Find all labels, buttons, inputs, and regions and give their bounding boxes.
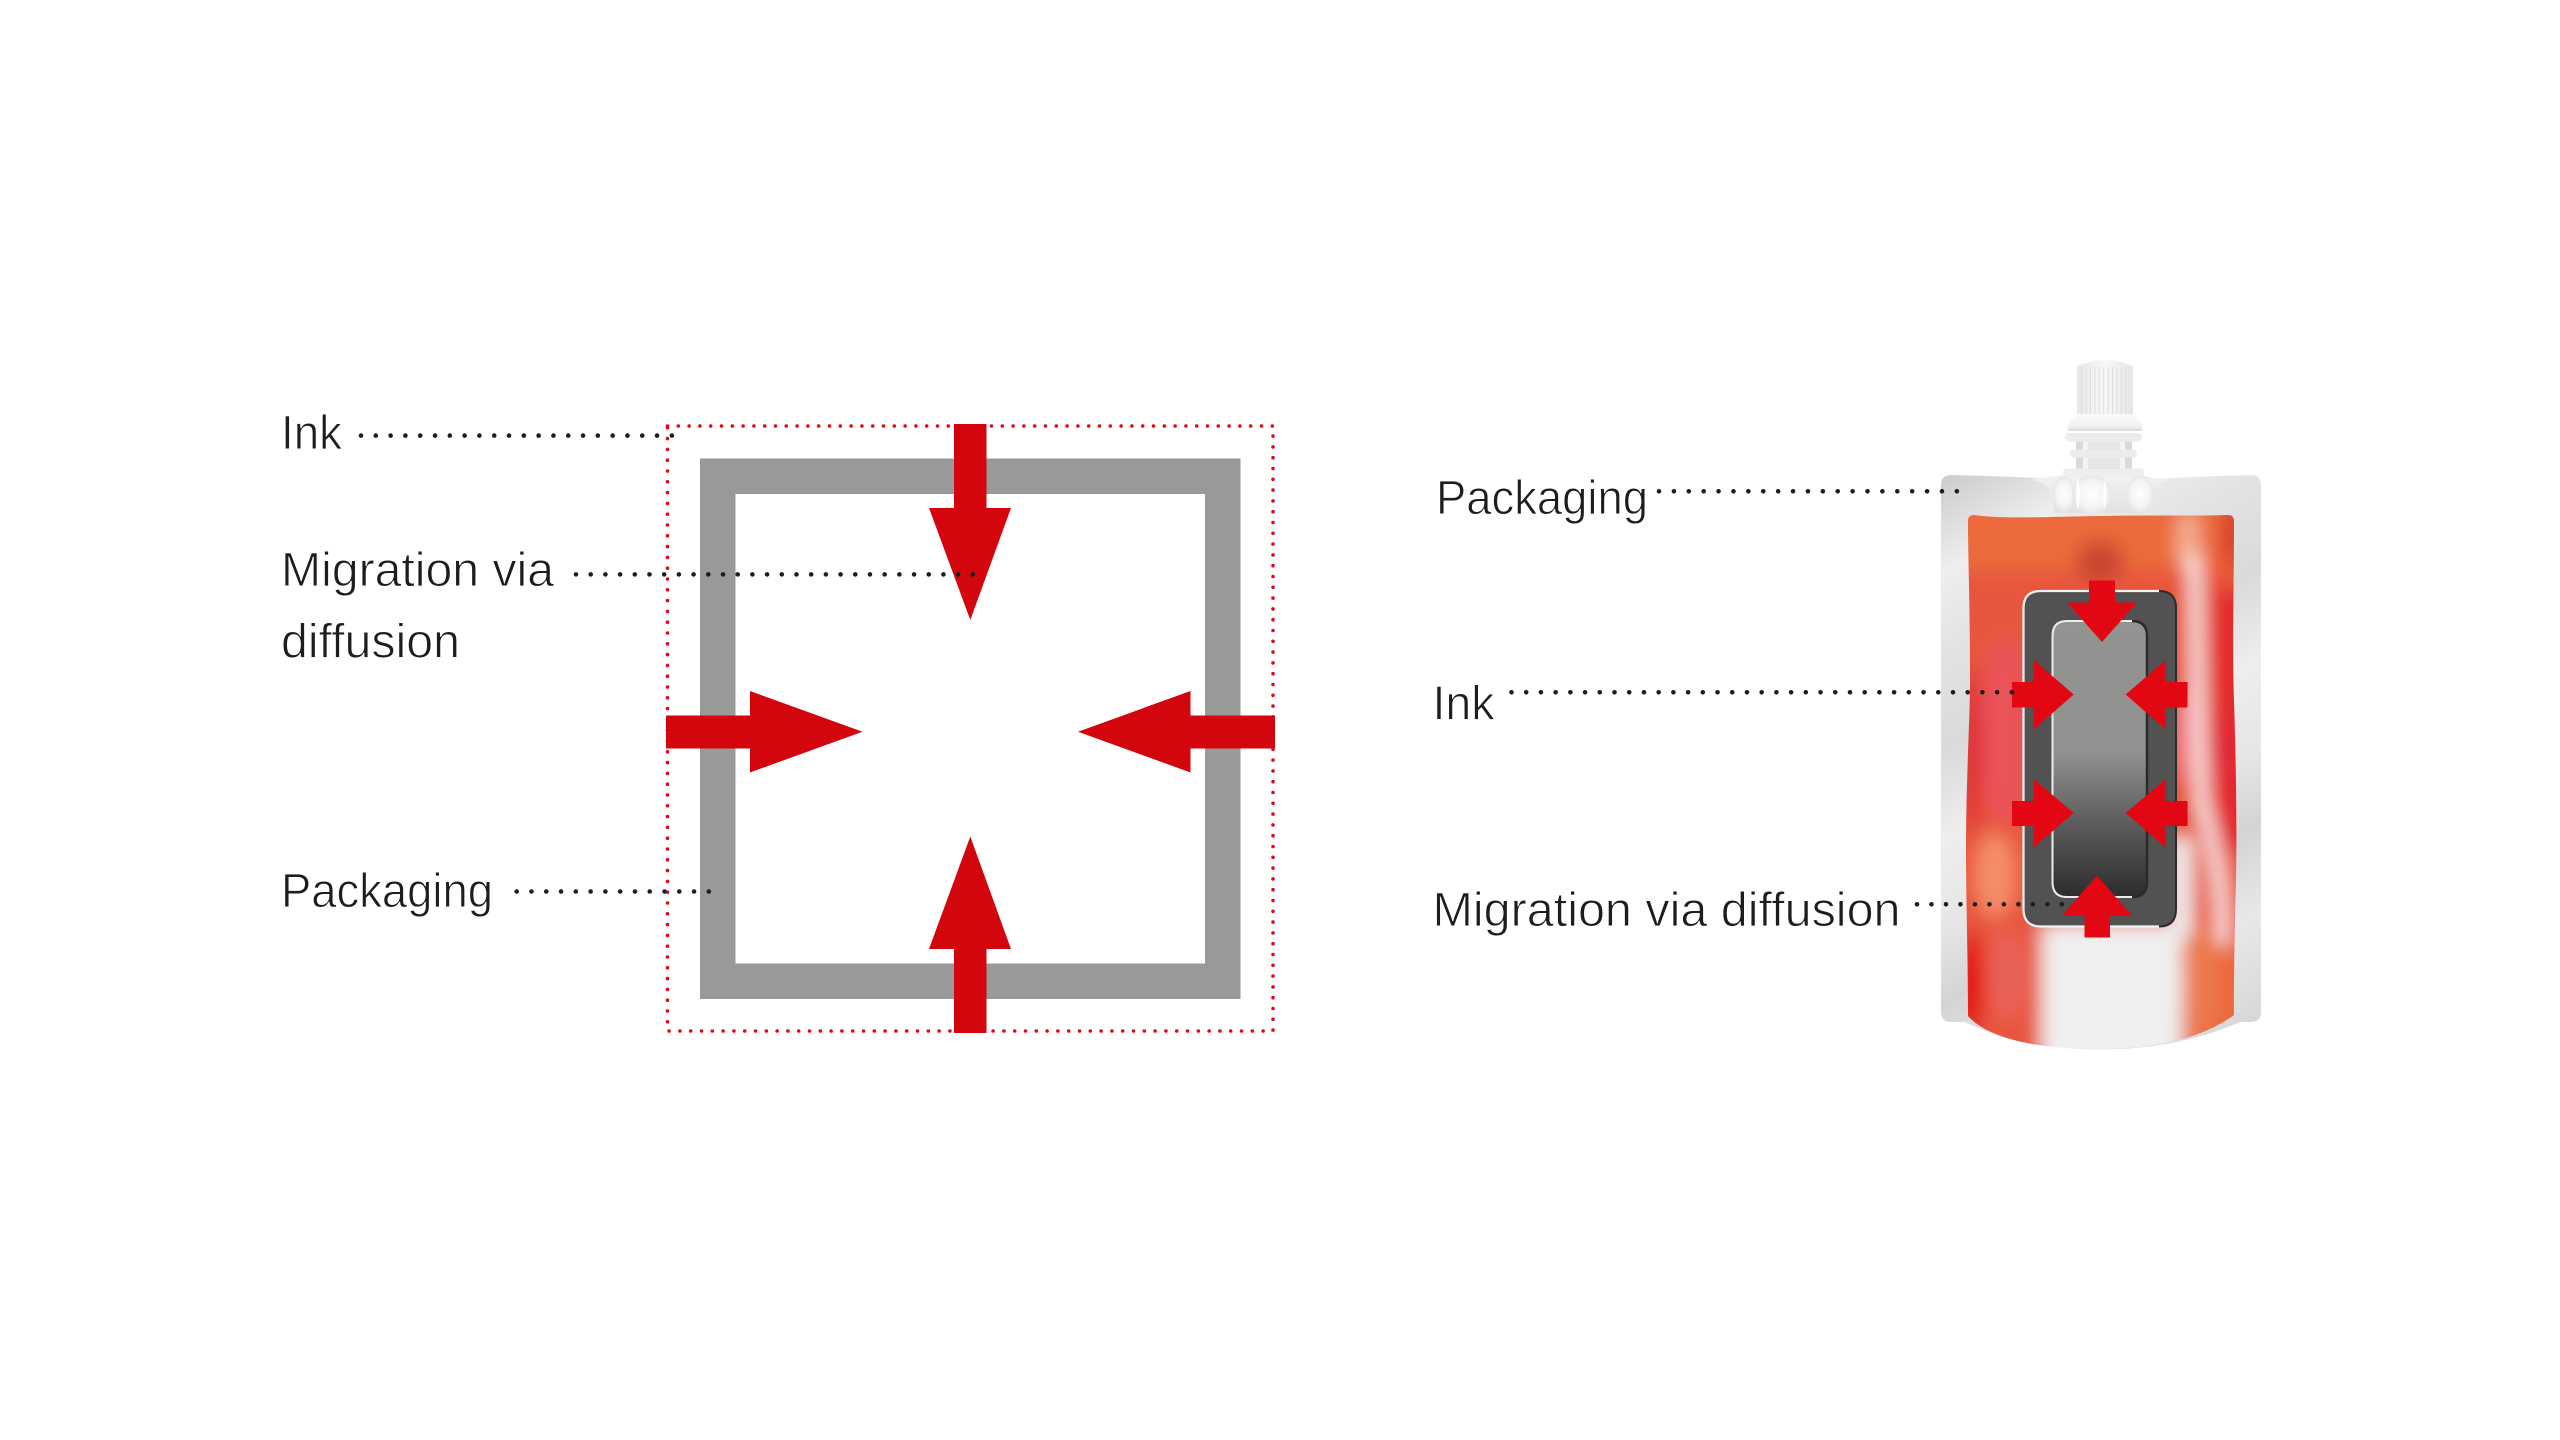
label: Ink: Ink — [1432, 678, 1495, 730]
arrow: left — [666, 691, 862, 772]
arrows: migration into product — [2012, 580, 2188, 938]
arrow: right — [1078, 691, 1275, 772]
arrow: top — [929, 424, 1011, 620]
inner layer — [2052, 621, 2148, 897]
packaging square — [700, 458, 1240, 999]
label: Migration via diffusion: diffusion — [281, 616, 460, 669]
label: Packaging: Packaging — [281, 865, 493, 918]
spout and shoulder — [2030, 433, 2170, 514]
label: Migration via diffusion — [281, 544, 973, 669]
label: Ink: Ink — [281, 407, 343, 460]
pouch body — [1941, 475, 2261, 1050]
ink boundary dotted frame — [668, 426, 1273, 1031]
ink sample window — [2024, 591, 2176, 926]
printed ink area — [1966, 515, 2236, 1049]
label: Packaging: Packaging — [1436, 472, 1648, 525]
panel: schematic diffusion diagram — [281, 407, 1275, 1033]
panel: spouted pouch illustration — [1432, 360, 2270, 1080]
label: Migration via diffusion: Migration via diffusion — [1432, 884, 1900, 937]
arrow: bottom — [929, 836, 1011, 1033]
screw cap — [2068, 360, 2142, 431]
label: Migration via diffusion: Migration via — [281, 544, 554, 597]
